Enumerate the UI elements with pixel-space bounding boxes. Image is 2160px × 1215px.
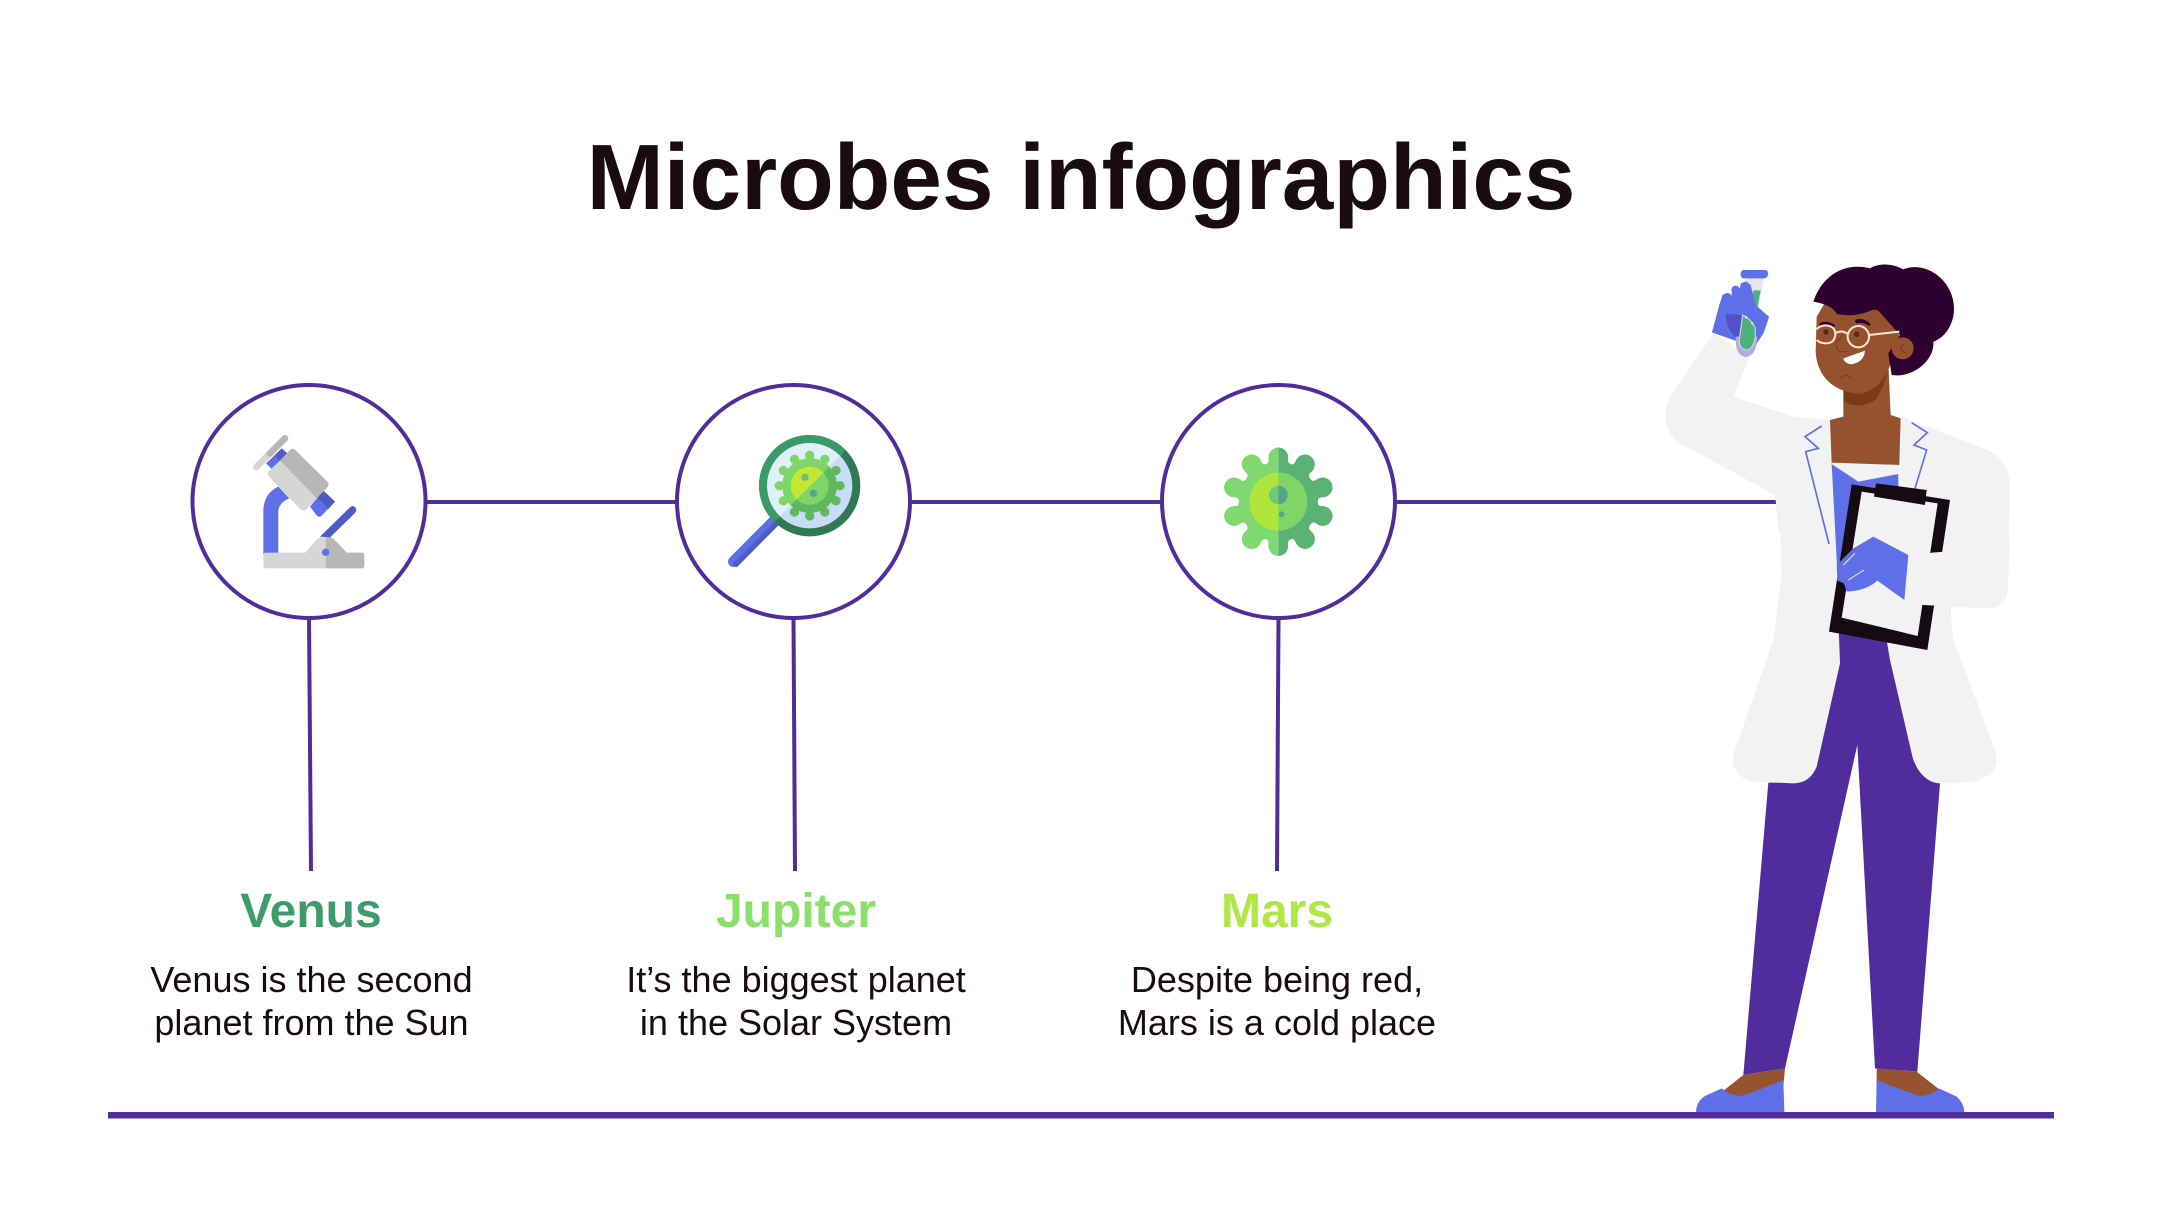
text block: Jupiter: It’s the biggest planet — [626, 959, 966, 1000]
icon: green microbe — [1224, 447, 1333, 556]
ground line — [108, 1112, 2054, 1118]
pants — [1743, 630, 1940, 1075]
vertical connector: Mars — [1277, 618, 1278, 871]
text block: Jupiter: in the Solar System — [640, 1002, 952, 1043]
horizontal connector line — [426, 500, 1780, 504]
title: Microbes infographics — [587, 125, 1575, 229]
coat shadows — [1727, 398, 1970, 615]
vertical connector: Jupiter — [794, 618, 795, 871]
heading: Mars: Mars — [1221, 885, 1333, 938]
vertical connector: Venus — [309, 618, 311, 871]
heading: Venus: Venus — [240, 885, 382, 938]
glasses — [1817, 325, 1899, 347]
text block: Mars: Mars is a cold place — [1118, 1002, 1436, 1043]
circle: Jupiter — [677, 385, 910, 618]
face details — [1819, 319, 1871, 327]
circle: Venus — [192, 385, 426, 618]
text block: Venus: planet from the Sun — [154, 1002, 469, 1043]
circle: Mars — [1162, 385, 1395, 618]
hair — [1813, 265, 1954, 375]
shoes — [1696, 1080, 1964, 1113]
right sleeve — [1904, 540, 2010, 608]
raised arm and lab coat — [1666, 333, 1840, 783]
ankles — [1720, 1068, 1940, 1103]
lapels — [1805, 423, 1927, 544]
inner shirt — [1832, 463, 1899, 485]
ear and head — [1816, 300, 1900, 394]
gloved hand on clipboard — [1837, 537, 1908, 600]
illustration: scientist — [1666, 265, 2010, 1113]
clipboard — [1829, 484, 1950, 650]
test tube with gloved hand — [1745, 278, 1764, 308]
heading: Jupiter: Jupiter — [716, 885, 876, 938]
text block: Venus: Venus is the second — [150, 959, 473, 1000]
icon: microscope — [256, 438, 364, 568]
neck and chest — [1830, 363, 1901, 465]
text block: Mars: Despite being red, — [1131, 959, 1423, 1000]
icon: magnifier with virus — [733, 439, 856, 564]
